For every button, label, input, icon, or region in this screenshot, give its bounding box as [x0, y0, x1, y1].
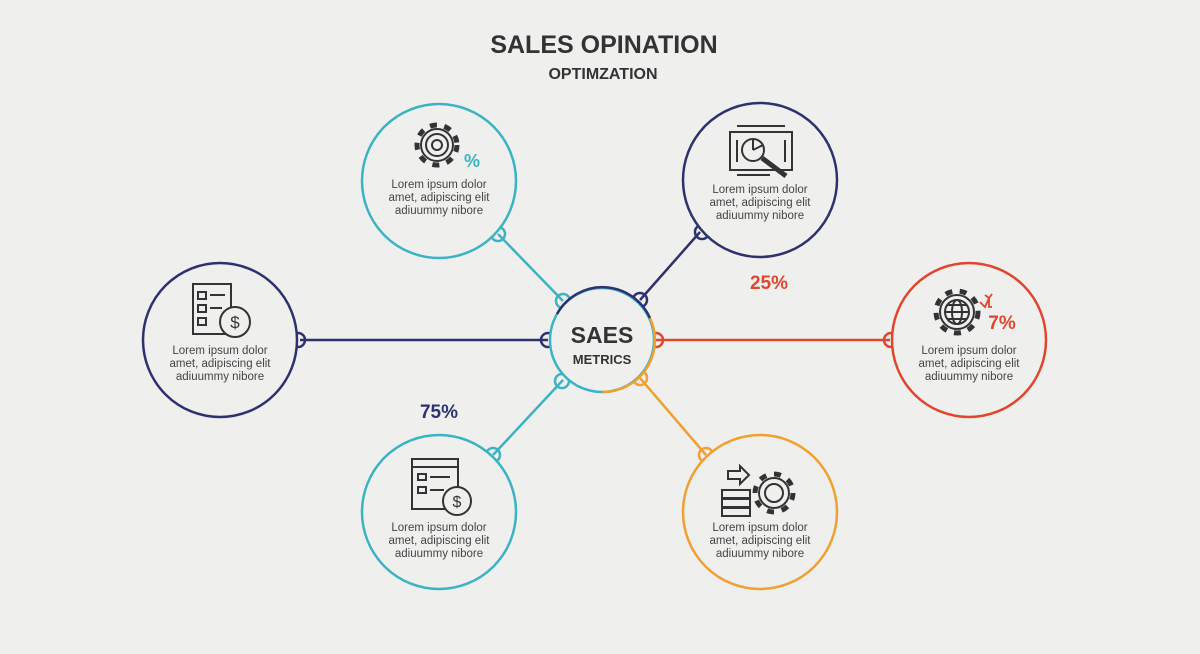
panel: left: amet, adipiscing elit: [170, 358, 271, 370]
panel: top-left: %: [464, 151, 480, 171]
panel: top-left: adiuummy nibore: [395, 205, 483, 217]
panel: top-right: adiuummy nibore: [716, 210, 804, 222]
panel: bottom-left: $: [453, 494, 462, 511]
panel: right: [892, 263, 1046, 417]
panel: top-left: [362, 104, 516, 258]
panel: bottom-right: Lorem ipsum dolor: [712, 522, 808, 534]
icon: invoice dollar: [412, 459, 471, 515]
subtitle: OPTIMZATION: [548, 66, 658, 83]
center hub: SAES: [571, 322, 633, 348]
panel: left: Lorem ipsum dolor: [172, 345, 268, 357]
panel: bottom-right: [683, 435, 837, 589]
panel: top-right: Lorem ipsum dolor: [712, 184, 808, 196]
panel: top-left: amet, adipiscing elit: [388, 192, 490, 204]
panel: right: 7%: [988, 313, 1016, 334]
center hub: METRICS: [573, 352, 632, 367]
title: SALES OPINATION: [490, 31, 718, 59]
icon: gear: [417, 125, 457, 165]
panel: left: adiuummy nibore: [176, 371, 264, 383]
panel: bottom-right: amet, adipiscing elit: [710, 535, 811, 547]
icon: list with dollar: [193, 284, 250, 337]
panel: bottom-left: amet, adipiscing elit: [388, 535, 490, 547]
connectors: [291, 225, 898, 462]
panel: right: adiuummy nibore: [925, 371, 1013, 383]
panel: left: [143, 263, 297, 417]
center hub: [550, 287, 655, 392]
panel: bottom-left: Lorem ipsum dolor: [391, 522, 487, 534]
label: 75%: 75%: [420, 402, 458, 423]
icon: chart magnifier: [730, 126, 792, 176]
panel: bottom-left: [362, 435, 516, 589]
panel: right: amet, adipiscing elit: [918, 358, 1020, 370]
label: 25%: 25%: [750, 273, 788, 294]
panel: right: Lorem ipsum dolor: [921, 345, 1017, 357]
panel: bottom-right: adiuummy nibore: [716, 548, 804, 560]
icon: server gear: [722, 466, 793, 516]
panel: bottom-left: adiuummy nibore: [395, 548, 483, 560]
icon: globe gear: [936, 291, 978, 333]
panel: top-right: amet, adipiscing elit: [710, 197, 811, 209]
panel: top-right: [683, 103, 837, 257]
panel: left: $: [230, 313, 240, 332]
panel: top-left: Lorem ipsum dolor: [391, 179, 487, 191]
